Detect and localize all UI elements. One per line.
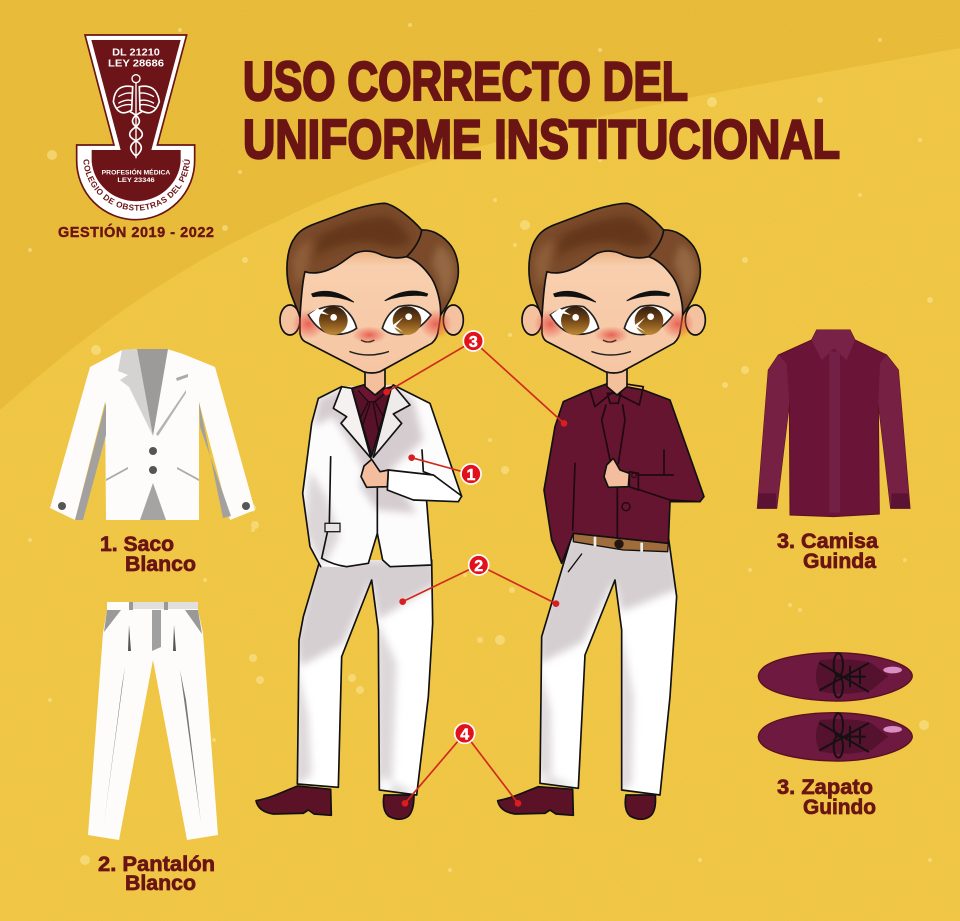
right figure trousers and shoes (498, 537, 680, 819)
garment: burgundy shoes pair (758, 653, 912, 761)
logo shield (77, 35, 195, 220)
label: 1. Saco Blanco: 1. Saco (100, 533, 174, 556)
right figure head (522, 203, 705, 395)
logo profession text: PROFESIÓN MÉDICA (102, 167, 171, 176)
right figure collar and tie (590, 383, 643, 407)
label: 3. Zapato Guindo: Guindo (803, 796, 876, 819)
title: USO CORRECTO DEL (243, 50, 688, 112)
right figure hand and cuff (629, 472, 638, 490)
callout 3: shirt pointers: 3 (469, 334, 478, 351)
title: UNIFORME INSTITUCIONAL (243, 108, 840, 170)
label: 2. Pantalón Blanco: Blanco (125, 872, 196, 895)
callout 1: jacket pointer: 1 (467, 467, 476, 484)
right figure shirt (544, 370, 704, 563)
right figure belt (573, 533, 668, 552)
right figure neck (608, 370, 622, 391)
garment: white jacket (50, 349, 255, 520)
figure: boy in white jacket (256, 203, 463, 819)
logo profession text: LEY 23346 (117, 177, 155, 184)
callout 1: jacket pointer (408, 454, 481, 484)
logo profession text (102, 167, 171, 184)
label: 3. Zapato Guindo: 3. Zapato (777, 776, 873, 799)
logo caduceus (113, 75, 159, 158)
label: 1. Saco Blanco (100, 533, 196, 576)
label: 2. Pantalón Blanco (98, 853, 215, 895)
garment: white trousers (88, 602, 218, 840)
left figure jacket (303, 384, 462, 567)
left figure head (280, 203, 463, 395)
label: 3. Camisa Guinda (777, 530, 878, 573)
left figure pocket fold line (422, 450, 435, 476)
shoe top (758, 653, 912, 701)
callout 2: trousers pointers (399, 555, 559, 607)
left figure arm and hand (387, 470, 462, 502)
logo legal references (108, 47, 165, 69)
label: 2. Pantalón Blanco: 2. Pantalón (98, 853, 215, 876)
figure: boy in burgundy shirt (498, 203, 705, 819)
callout 4: shoes pointers (402, 723, 521, 807)
logo curved text: COLEGIO DE OBSTETRAS DEL PERÚ (84, 159, 190, 211)
callout 2: trousers pointers: 2 (474, 558, 483, 575)
garment: burgundy shirt (757, 330, 910, 517)
callout 4: shoes pointers: 4 (460, 726, 469, 743)
label: 3. Camisa Guinda: 3. Camisa (777, 530, 878, 553)
left figure shirt and tie (352, 384, 392, 456)
logo legal references: LEY 28686 (108, 58, 165, 69)
logo caption: management period: GESTIÓN 2019 - 2022 (58, 223, 214, 241)
left figure lapels (333, 387, 371, 458)
callout 3: shirt pointers (383, 331, 567, 427)
title (243, 50, 840, 170)
logo legal references: DL 21210 (112, 47, 160, 58)
left figure trousers and shoes (256, 560, 437, 819)
shoe bottom (758, 713, 912, 761)
logo: Colegio de Obstetras del Perú (76, 34, 196, 220)
label: 1. Saco Blanco: Blanco (125, 553, 196, 576)
label: 3. Camisa Guinda: Guinda (803, 550, 876, 573)
label: 3. Zapato Guindo (777, 776, 876, 819)
